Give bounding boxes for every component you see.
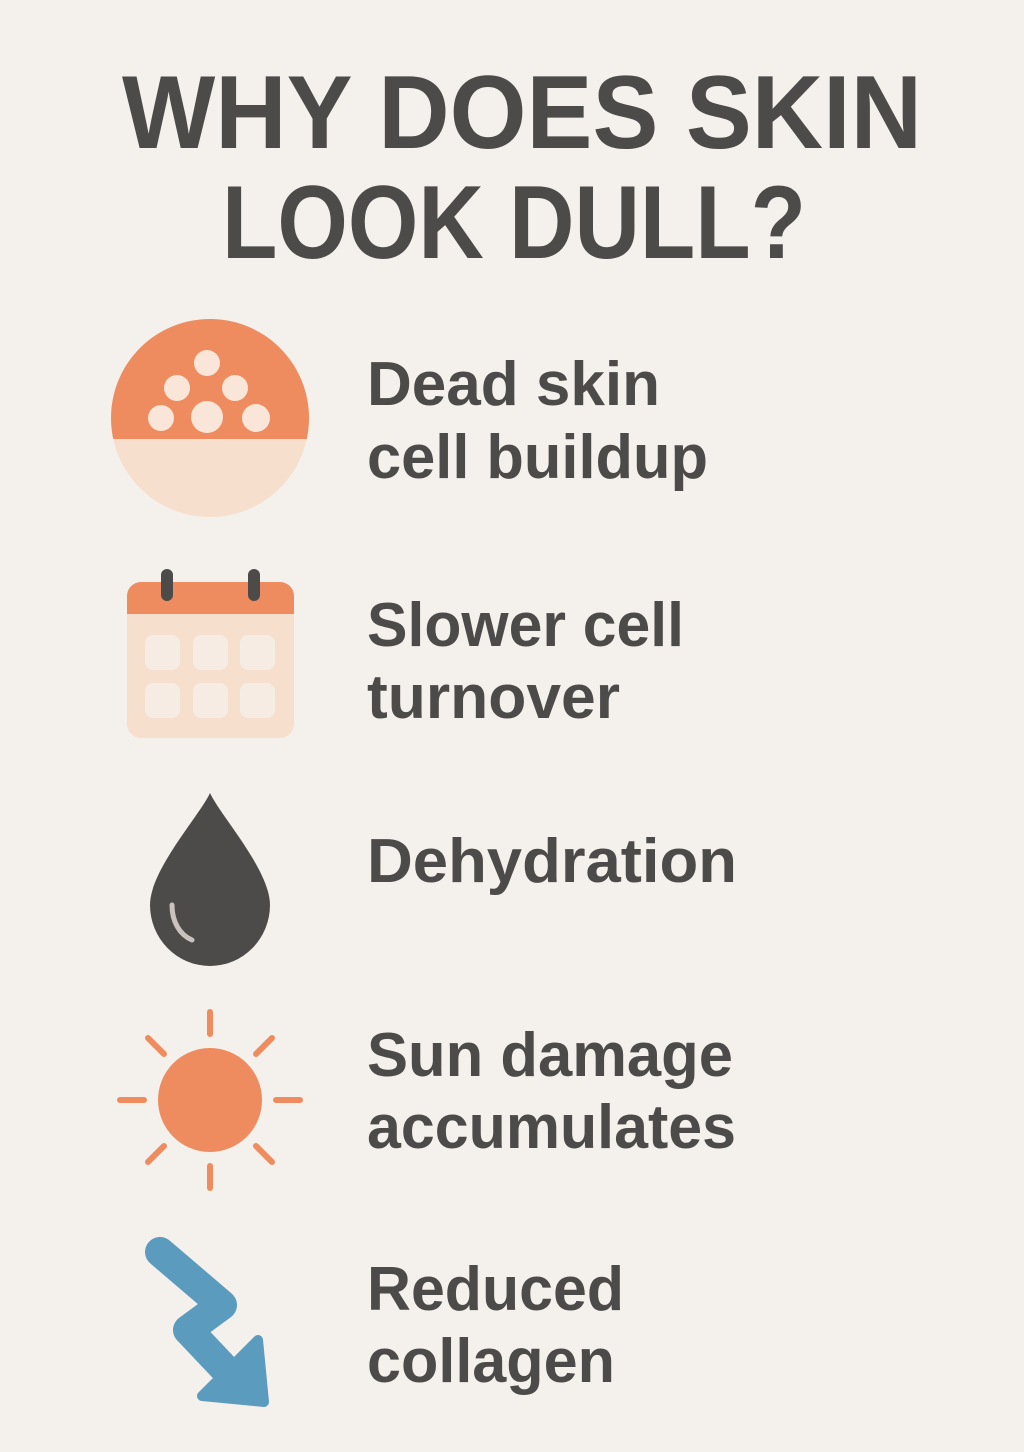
icon: calendar — [127, 569, 294, 738]
text: slower cell turnover: Slower cell — [367, 591, 684, 660]
text: slower cell turnover: turnover — [367, 663, 620, 732]
text: dead skin cell buildup: Dead skin — [367, 350, 660, 419]
text: dehydration: Dehydration — [367, 827, 737, 896]
text: reduced collagen: collagen — [367, 1327, 615, 1396]
title: LOOK DULL? — [222, 165, 806, 281]
icon: sun — [120, 1012, 300, 1188]
title — [122, 55, 922, 281]
icon: down arrow — [160, 1252, 264, 1402]
text: reduced collagen: Reduced — [367, 1255, 624, 1324]
text: sun damage accumulates: Sun damage — [367, 1021, 733, 1090]
icon: skin cells circle — [111, 319, 309, 517]
text: dead skin cell buildup: cell buildup — [367, 423, 708, 492]
title: WHY DOES SKIN — [122, 55, 922, 171]
text: slower cell turnover — [367, 591, 684, 732]
text: reduced collagen — [367, 1255, 624, 1396]
icon: water drop — [150, 793, 270, 966]
text: sun damage accumulates: accumulates — [367, 1093, 736, 1162]
text: sun damage accumulates — [367, 1021, 736, 1162]
text: dead skin cell buildup — [367, 350, 708, 492]
